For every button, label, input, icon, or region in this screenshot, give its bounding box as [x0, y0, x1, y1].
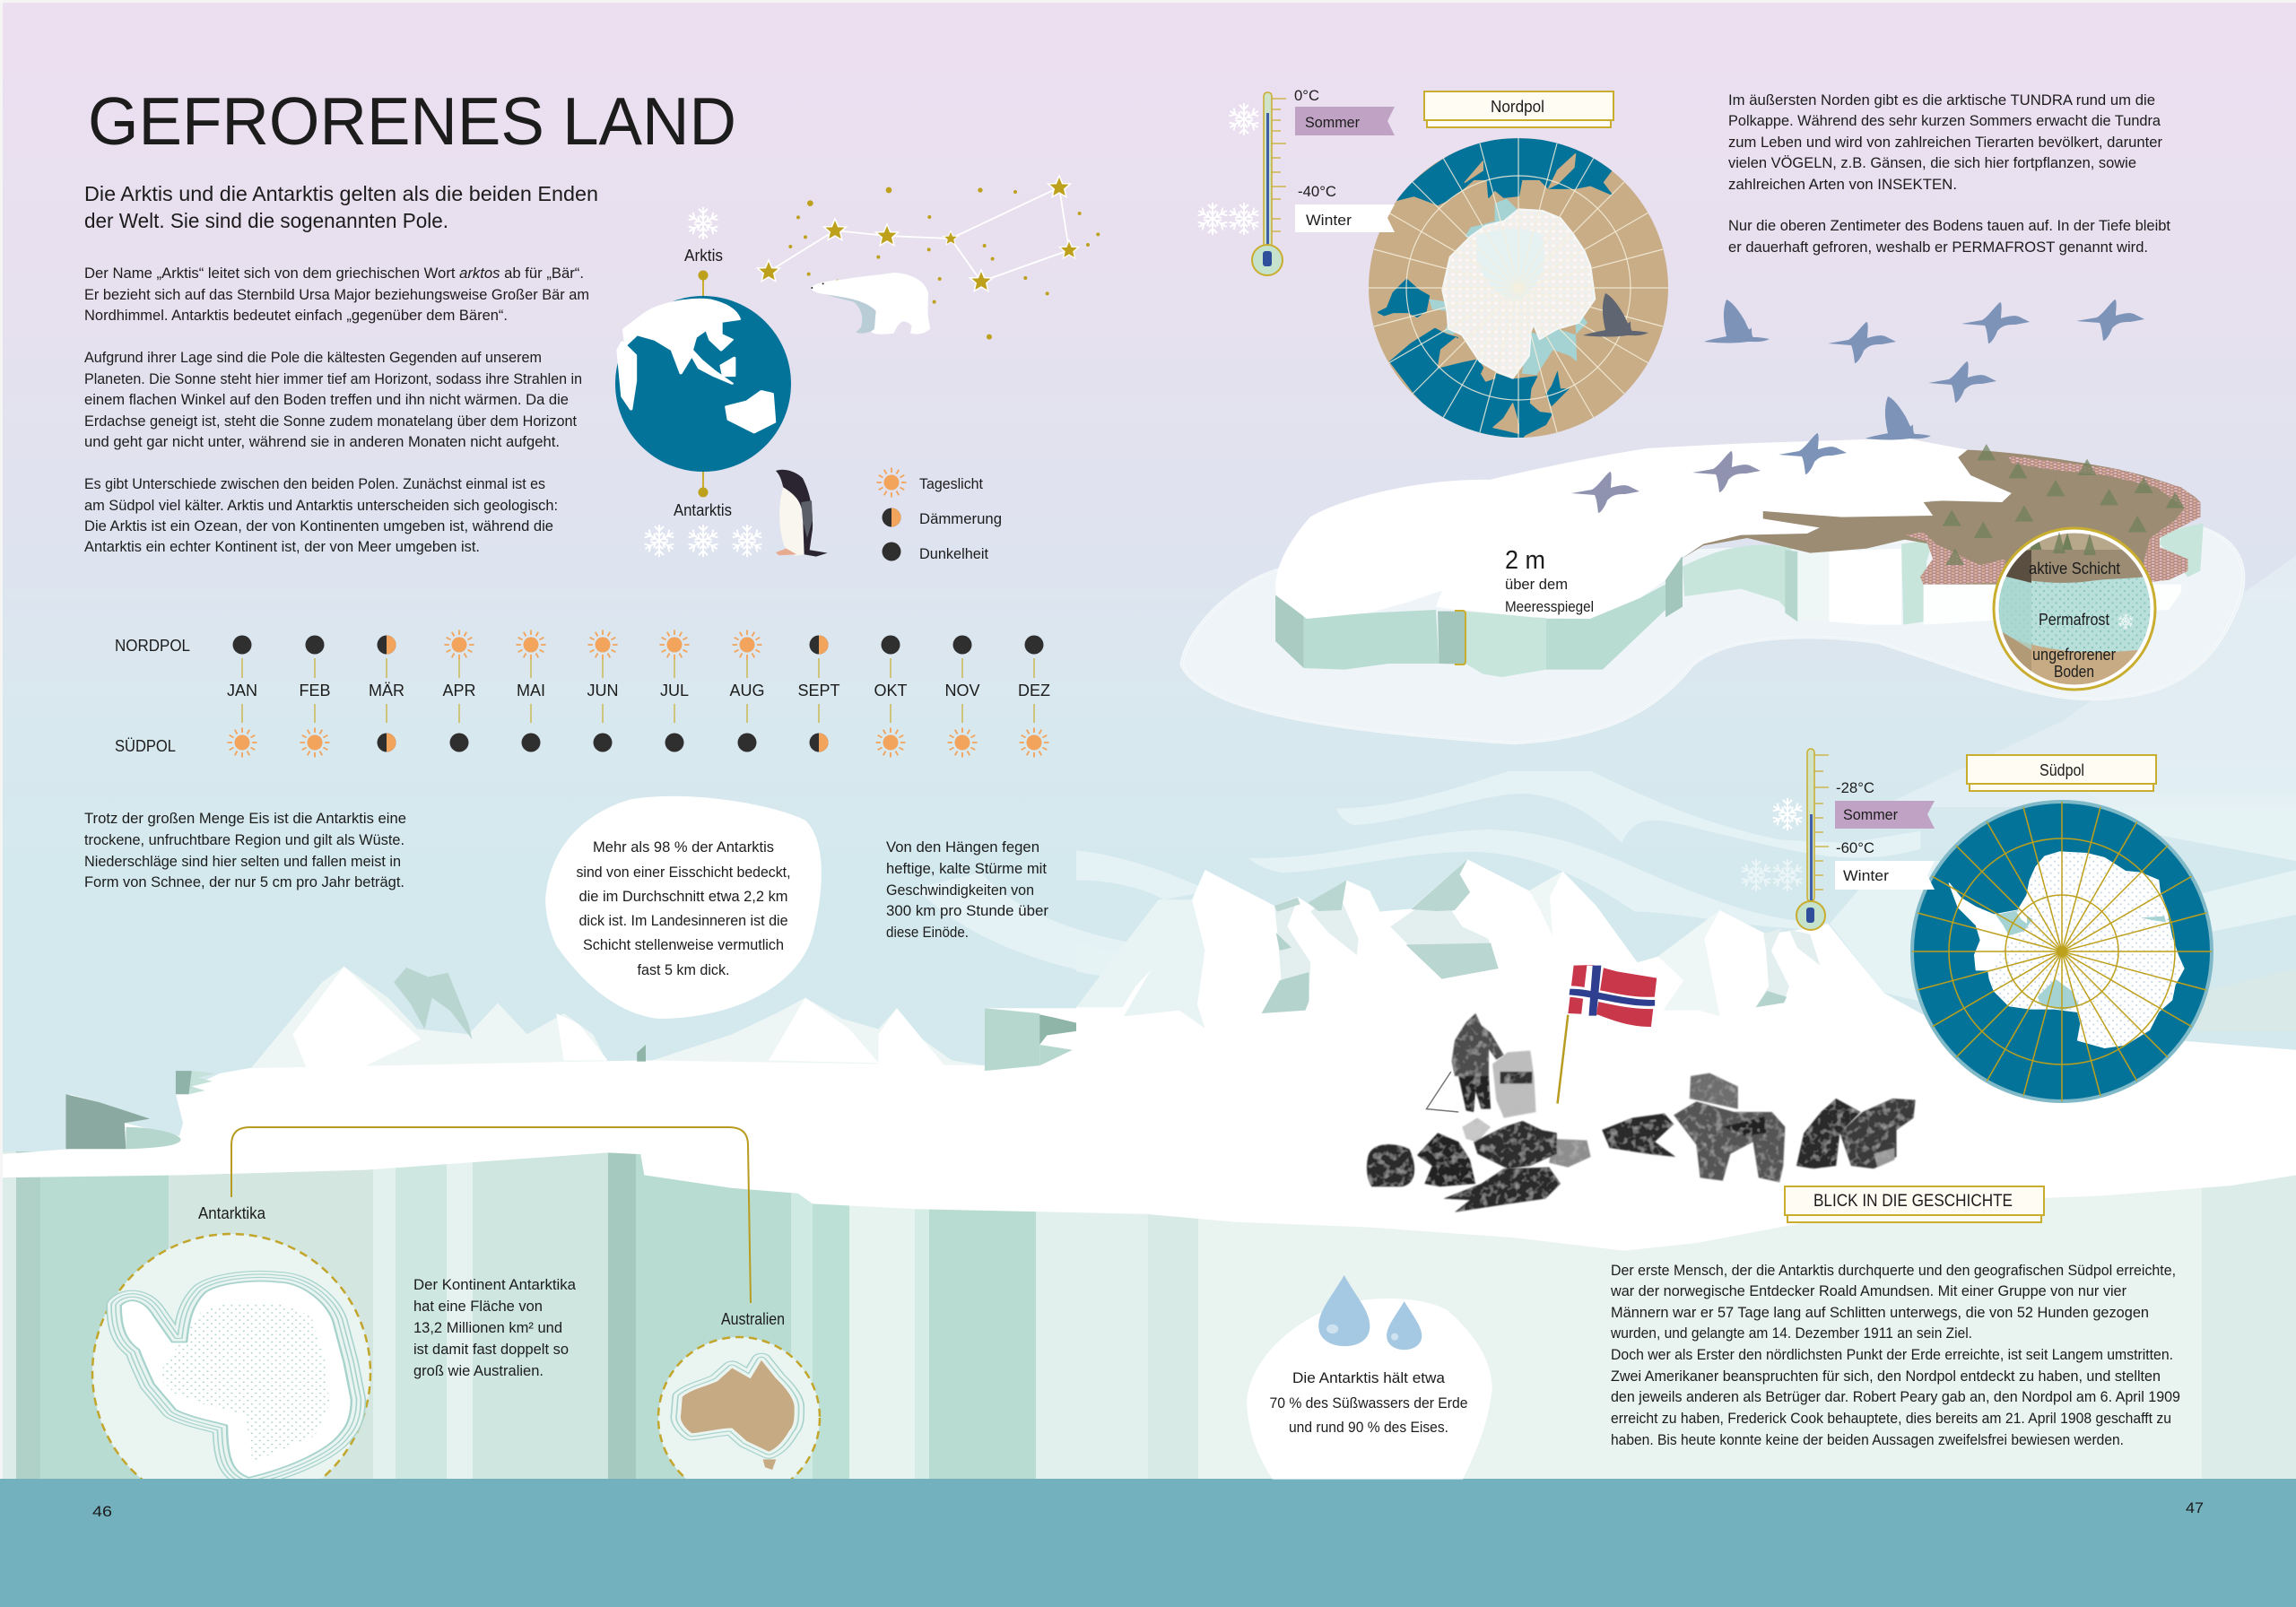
text block: desert	[84, 810, 406, 890]
text block: name origin: Nordhimmel. Antarktis bedeutet einfach „gegenüber dem Bären“.	[84, 307, 508, 324]
text block: cold poles: Aufgrund ihrer Lage sind die Pole die kältesten Gegenden auf unserem	[84, 349, 542, 366]
crate	[1690, 1073, 1738, 1109]
text block: cold poles: Planeten. Die Sonne steht hier immer tief am Horizont, sodass ihre Strahlen in	[84, 370, 582, 387]
snowflake in permafrost	[2118, 613, 2134, 630]
label: Antarktika: Antarktika	[198, 1204, 266, 1222]
text block: storms: Geschwindigkeiten von	[886, 882, 1034, 899]
text block: cold poles: Erdachse geneigt ist, steht die Sonne zudem monatelang über dem Horizont	[84, 413, 577, 430]
callout: ice sheet: Schicht stellenweise vermutlich	[583, 936, 784, 953]
ice block small	[176, 1071, 192, 1094]
legend: light conditions	[877, 468, 1002, 562]
labels: soil layers: ungefrorener	[2032, 646, 2116, 664]
connector line	[231, 1127, 751, 1303]
hill behind island	[1880, 556, 2296, 807]
page number right: 47	[2186, 1499, 2204, 1516]
flag: Sommer north: Sommer	[1305, 114, 1360, 131]
labels: soil layers: Boden	[2054, 663, 2094, 681]
month labels: FEB	[299, 682, 331, 699]
legend: light conditions: Tageslicht	[919, 475, 983, 492]
panel: left mountains	[249, 967, 985, 1071]
legend: light conditions: Dämmerung	[919, 510, 1002, 527]
illustration: expedition with flag and dogs	[1367, 965, 1916, 1212]
icon: polar bear	[811, 273, 930, 334]
page number left: 46	[92, 1503, 112, 1520]
mountains behind expedition	[1076, 859, 1883, 1130]
callout: ice sheet: die im Durchschnitt etwa 2,2 km	[579, 888, 787, 905]
flag of Norway	[1558, 965, 1657, 1104]
text block: cold poles: einem flachen Winkel auf den Boden treffen und ihn nicht wärmen. Da die	[84, 391, 569, 408]
row labels	[115, 637, 190, 755]
callout: fresh water: und rund 90 % des Eises.	[1289, 1419, 1448, 1436]
heading box: Blick in die Geschichte	[1785, 1186, 2044, 1222]
callout: ice sheet	[545, 796, 822, 1019]
heading box: Südpol: Südpol	[2039, 761, 2084, 779]
labels: soil layers: aktive Schicht	[2029, 560, 2120, 578]
text block: continent size: groß wie Australien.	[413, 1362, 544, 1379]
callout: fresh water	[1247, 1275, 1492, 1479]
callout: ice sheet: Mehr als 98 % der Antarktis	[593, 838, 774, 856]
text block: history: Der erste Mensch, der die Antarktis durchquerte und den geografischen Südpol erreichte,	[1611, 1262, 2176, 1279]
label: 0 degrees: 0°C	[1294, 87, 1319, 104]
text block: storms: diese Einöde.	[886, 924, 969, 941]
tundra trees	[1943, 444, 2185, 565]
flag: Sommer south	[1835, 801, 1935, 829]
text block: storms	[886, 838, 1048, 941]
labels: soil layers: Permafrost	[2039, 611, 2109, 629]
callout: fresh water: 70 % des Süßwassers der Erde	[1270, 1394, 1467, 1412]
text block: history: erreicht zu haben, Frederick Cook behauptete, dies bereits am 21. April 1908 geschafft zu	[1611, 1410, 2171, 1427]
text block: desert: Niederschläge sind hier selten und fallen meist in	[84, 853, 401, 870]
teal sea ice	[1465, 199, 1518, 239]
text block: desert: Form von Schnee, der nur 5 cm pro Jahr beträgt.	[84, 873, 404, 890]
icon: penguin	[776, 470, 828, 557]
ice block left	[65, 1094, 150, 1149]
chart: polar day and night calendar	[115, 630, 1050, 757]
text block: desert: Trotz der großen Menge Eis ist die Antarktis eine	[84, 810, 406, 827]
dogs	[1367, 1099, 1916, 1212]
snowflakes	[1771, 798, 1804, 830]
panel: permafrost cross-section	[1991, 525, 2161, 695]
text block: history: war der norwegische Entdecker Roald Amundsen. Mit einer Gruppe von nur vier	[1610, 1282, 2126, 1299]
label: 2 m above sea level	[1505, 546, 1594, 615]
heading box: Nordpol: Nordpol	[1491, 98, 1544, 116]
sky wind ribbons	[915, 771, 2296, 1031]
text block: storms: heftige, kalte Stürme mit	[886, 860, 1047, 877]
label: minus 28 degrees: -28°C	[1836, 779, 1874, 796]
panel: Antarctica size map	[91, 1232, 371, 1479]
panel: Australia size map	[658, 1337, 820, 1498]
month labels: SEPT	[797, 682, 840, 699]
thermometer: south	[1740, 749, 1829, 930]
month labels: AUG	[729, 682, 765, 699]
ice top	[1275, 438, 2012, 619]
callout: ice sheet: sind von einer Eisschicht bedeckt,	[576, 864, 791, 881]
text block: cold poles: und geht gar nicht unter, während sie in anderen Monaten nicht aufgeht.	[84, 433, 560, 450]
month labels: JUL	[660, 682, 689, 699]
month labels: MÄR	[369, 682, 404, 699]
intro heading: Die Arktis und die Antarktis gelten als die beiden Enden	[84, 182, 598, 205]
month labels: MAI	[517, 682, 545, 699]
intro heading: der Welt. Sie sind die sogenannten Pole.	[84, 209, 448, 232]
text block: continent size: Der Kontinent Antarktika	[413, 1276, 577, 1293]
flower strips	[2008, 456, 2200, 583]
text block: permafrost: Nur die oberen Zentimeter des Bodens tauen auf. In der Tiefe bleibt	[1728, 217, 2170, 234]
text block: differences: Antarktis ein echter Kontinent ist, der von Meer umgeben ist.	[84, 538, 480, 555]
text block: history: Zwei Amerikaner beanspruchten für sich, den Nordpol entdeckt zu haben, und stellten	[1611, 1368, 2161, 1385]
flag: Winter north: Winter	[1306, 212, 1352, 229]
text block: tundra: zum Leben und wird von zahlreichen Tierarten bevölkert, darunter	[1728, 134, 2162, 151]
row labels: NORDPOL	[115, 637, 190, 655]
text block: permafrost	[1728, 217, 2170, 256]
month labels: OKT	[874, 682, 908, 699]
text block: tundra: vielen VÖGELN, z.B. Gänsen, die sich hier fortpflanzen, sowie	[1728, 154, 2136, 171]
text block: continent size: 13,2 Millionen km² und	[413, 1319, 562, 1336]
flag: Winter south: Winter	[1843, 867, 1889, 884]
text block: differences	[84, 475, 558, 555]
text block: storms: Von den Hängen fegen	[886, 838, 1039, 856]
text block: differences: am Südpol viel kälter. Arktis und Antarktis unterscheiden sich geologisch:	[84, 497, 558, 514]
text block: history	[1610, 1262, 2180, 1448]
text block: tundra: zahlreichen Arten von INSEKTEN.	[1728, 176, 1957, 193]
flag: Winter south	[1835, 861, 1935, 890]
callout: ice sheet: fast 5 km dick.	[637, 961, 730, 978]
month labels: JUN	[587, 682, 619, 699]
label: 2 m above sea level: über dem	[1505, 576, 1568, 593]
intro heading	[84, 182, 598, 232]
sled	[1492, 1051, 1536, 1118]
graticule	[1369, 138, 1668, 438]
ice wall sides	[1275, 589, 1304, 668]
flag: Winter north	[1295, 204, 1395, 232]
icon: water drops	[1318, 1275, 1422, 1350]
flag: Sommer north	[1295, 107, 1395, 135]
text block: tundra	[1728, 91, 2162, 193]
text block: storms: 300 km pro Stunde über	[886, 902, 1048, 919]
panel: ice wall	[0, 1151, 2296, 1480]
constellation: Ursa Major	[757, 176, 1100, 340]
north row icons	[233, 630, 1044, 660]
callout: ice sheet: dick ist. Im Landesinneren ist die	[579, 912, 787, 929]
icon: globe with poles	[615, 271, 791, 497]
text block: differences: Die Arktis ist ein Ozean, der von Kontinenten umgeben ist, während die	[84, 517, 553, 534]
arctic ocean regions	[1396, 139, 1612, 204]
pale bands right of south map	[2090, 794, 2296, 861]
month labels	[227, 682, 1050, 699]
text block: history: Doch wer als Erster den nördlichsten Punkt der Erde erreichte, ist seit Langem umstritten.	[1611, 1346, 2173, 1363]
text block: differences: Es gibt Unterschiede zwischen den beiden Polen. Zunächst einmal ist es	[84, 475, 545, 492]
label: Australien: Australien	[721, 1310, 785, 1328]
explorer	[1452, 1013, 1504, 1112]
text block: history: Männern war er 57 Tage lang auf Schlitten unterwegs, die von 52 Hunden gezogen	[1611, 1304, 2149, 1321]
month labels: DEZ	[1018, 682, 1050, 699]
month labels: JAN	[227, 682, 257, 699]
gold height bracket	[1455, 611, 1465, 665]
text block: name origin: Er bezieht sich auf das Sternbild Ursa Major beziehungsweise Großer Bär am	[84, 286, 589, 303]
heading box: Nordpol	[1424, 91, 1613, 127]
text block: desert: trockene, unfruchtbare Region und gilt als Wüste.	[84, 831, 404, 848]
text block: history: wurden, und gelangte am 14. Dezember 1911 an sein Ziel.	[1610, 1325, 1972, 1342]
tundra	[1682, 450, 2200, 585]
map: south pole	[1912, 802, 2212, 1101]
label: Arktis: Arktis	[684, 247, 723, 265]
flag: Sommer south: Sommer	[1843, 806, 1898, 823]
heading box: Blick in die Geschichte: BLICK IN DIE GESCHICHTE	[1813, 1192, 2013, 1211]
legend: light conditions: Dunkelheit	[919, 545, 988, 562]
text block: tundra: Polkappe. Während des sehr kurzen Sommers erwacht die Tundra	[1728, 112, 2161, 129]
ice notch	[637, 1045, 646, 1062]
month labels: NOV	[944, 682, 980, 699]
label: 2 m above sea level: Meeresspiegel	[1505, 598, 1594, 615]
text block: name origin	[84, 265, 589, 324]
map: north pole	[1369, 138, 1668, 442]
title: GEFRORENES LAND	[88, 83, 736, 159]
ice block right	[985, 1008, 1039, 1071]
text block: tundra: Im äußersten Norden gibt es die arktische TUNDRA rund um die	[1728, 91, 2155, 109]
text block: continent size: hat eine Fläche von	[413, 1298, 543, 1315]
text block: cold poles	[84, 349, 582, 450]
snowflakes	[1228, 103, 1260, 135]
rock faces	[1262, 899, 1310, 1013]
text block: history: den jeweils anderen als Betrüger dar. Robert Peary gab an, den Nordpol am 6. April 1909	[1611, 1388, 2180, 1405]
text block: name origin: Der Name „Arktis“ leitet sich von dem griechischen Wort arktos ab für „Bär“.	[84, 265, 584, 282]
panel: arctic ice island	[1185, 438, 2296, 807]
label: minus 40 degrees: -40°C	[1298, 183, 1336, 200]
text block: continent size	[413, 1276, 577, 1379]
icon: dark goose	[1583, 293, 1648, 337]
label: Antarktis: Antarktis	[674, 501, 732, 519]
labels: soil layers	[2029, 560, 2120, 681]
month labels: APR	[442, 682, 476, 699]
callout: fresh water: Die Antarktis hält etwa	[1292, 1369, 1446, 1386]
text block: history: haben. Bis heute konnte keine der beiden Aussagen zweifelsfrei bewiesen werden.	[1611, 1431, 2124, 1448]
thermometer: north	[1196, 92, 1286, 275]
text block: permafrost: er dauerhaft gefroren, weshalb er PERMAFROST genannt wird.	[1728, 239, 2148, 256]
icons: flock of geese	[1571, 300, 2144, 513]
panel: white ice shelf	[0, 859, 2296, 1251]
label: 2 m above sea level: 2 m	[1505, 546, 1545, 575]
polar ice cap	[1442, 209, 1595, 378]
icon: snowflakes south	[643, 525, 763, 557]
label: minus 60 degrees: -60°C	[1836, 839, 1874, 856]
row labels: SÜDPOL	[115, 737, 176, 755]
icon: snowflake north	[687, 207, 719, 239]
panel: footer water band	[0, 1479, 2296, 1607]
heading box: Südpol	[1967, 755, 2156, 791]
text block: continent size: ist damit fast doppelt so	[413, 1341, 569, 1358]
south row icons	[228, 728, 1049, 757]
